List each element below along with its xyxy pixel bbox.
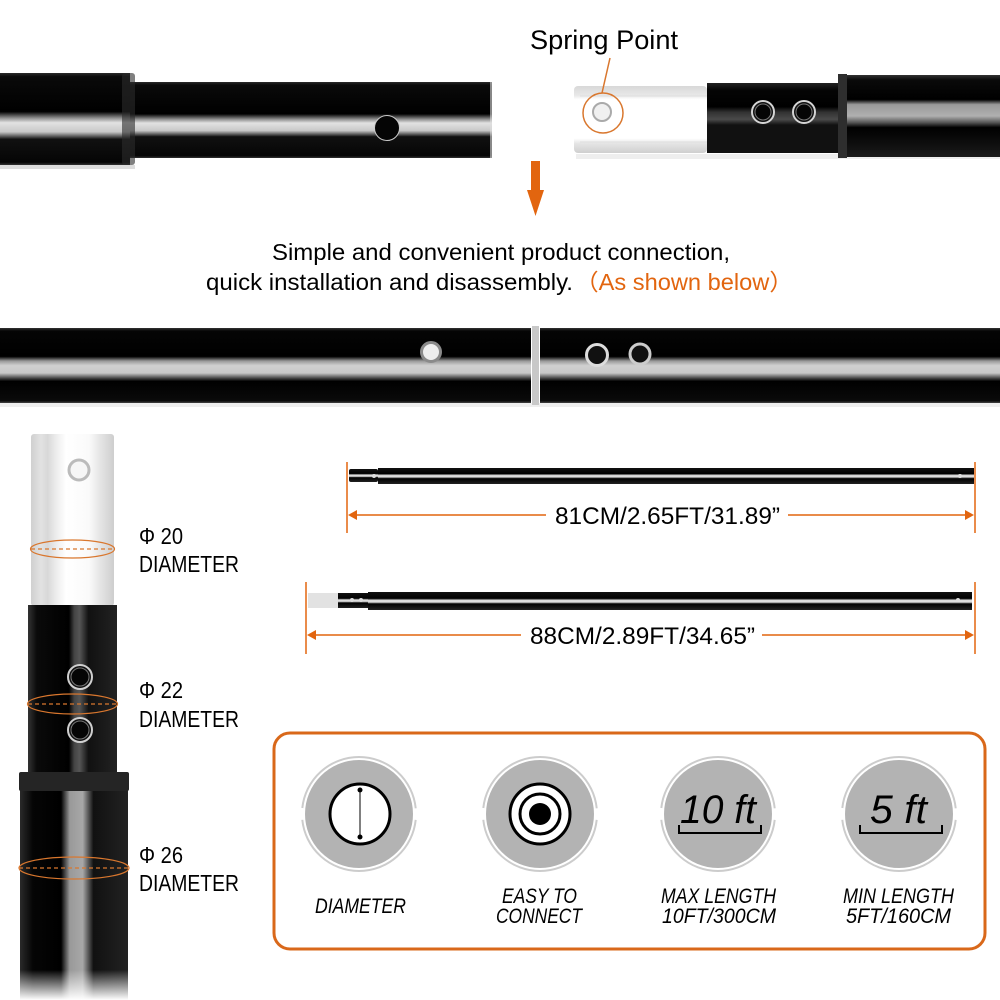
caption: connection description: （As shown below） [575,269,793,295]
label: diameter: DIAMETER [315,895,406,918]
dimension: 81cm: 81CM/2.65FT/31.89” [555,503,780,530]
photo: separated left tube [0,73,492,169]
icon: 5 ft [842,757,956,871]
diameter labels: DIAMETER [139,551,239,577]
icon: 10 ft [661,757,775,871]
label: easy to connect [496,885,584,928]
label: max length: MAX LENGTH [661,885,777,908]
diameter labels: DIAMETER [139,706,239,732]
photo: connected tube [0,326,1000,407]
pole: 81cm [349,468,974,484]
icon: diameter [302,757,416,871]
caption: connection description [206,239,793,295]
label: max length: 10FT/300CM [662,905,776,928]
dimension: 81cm [347,462,975,533]
photo: separated right tube with spring tip [574,74,1000,159]
label: min length [843,885,955,928]
label: spring point: Spring Point [530,25,678,55]
dimension: 88cm [306,582,975,654]
icon: 10 ft: 10 ft [680,788,758,832]
label: min length: MIN LENGTH [843,885,955,908]
caption: connection description: quick installation and disassembly. [206,269,573,295]
diameter labels: Φ 20 [139,523,183,549]
diameter markers [19,540,129,879]
callout: spring point circle and leader [583,58,623,133]
panel: features [274,733,985,949]
label: easy to connect: EASY TO [502,885,577,908]
diameter labels [139,523,239,896]
dimension: 88cm: 88CM/2.89FT/34.65” [530,623,755,650]
arrow: down [527,161,544,216]
label: min length: 5FT/160CM [846,905,951,928]
label: easy to connect: CONNECT [496,905,584,928]
icon: easy to connect [483,757,597,871]
photo: vertical tube with diameters [19,434,129,1000]
diameter labels: DIAMETER [139,870,239,896]
diameter labels: Φ 26 [139,842,183,868]
caption: connection description: Simple and convenient product connection, [272,239,730,265]
pole: 88cm [308,592,972,610]
label: max length [661,885,777,928]
icon: 5 ft: 5 ft [870,788,929,832]
diameter labels: Φ 22 [139,677,183,703]
